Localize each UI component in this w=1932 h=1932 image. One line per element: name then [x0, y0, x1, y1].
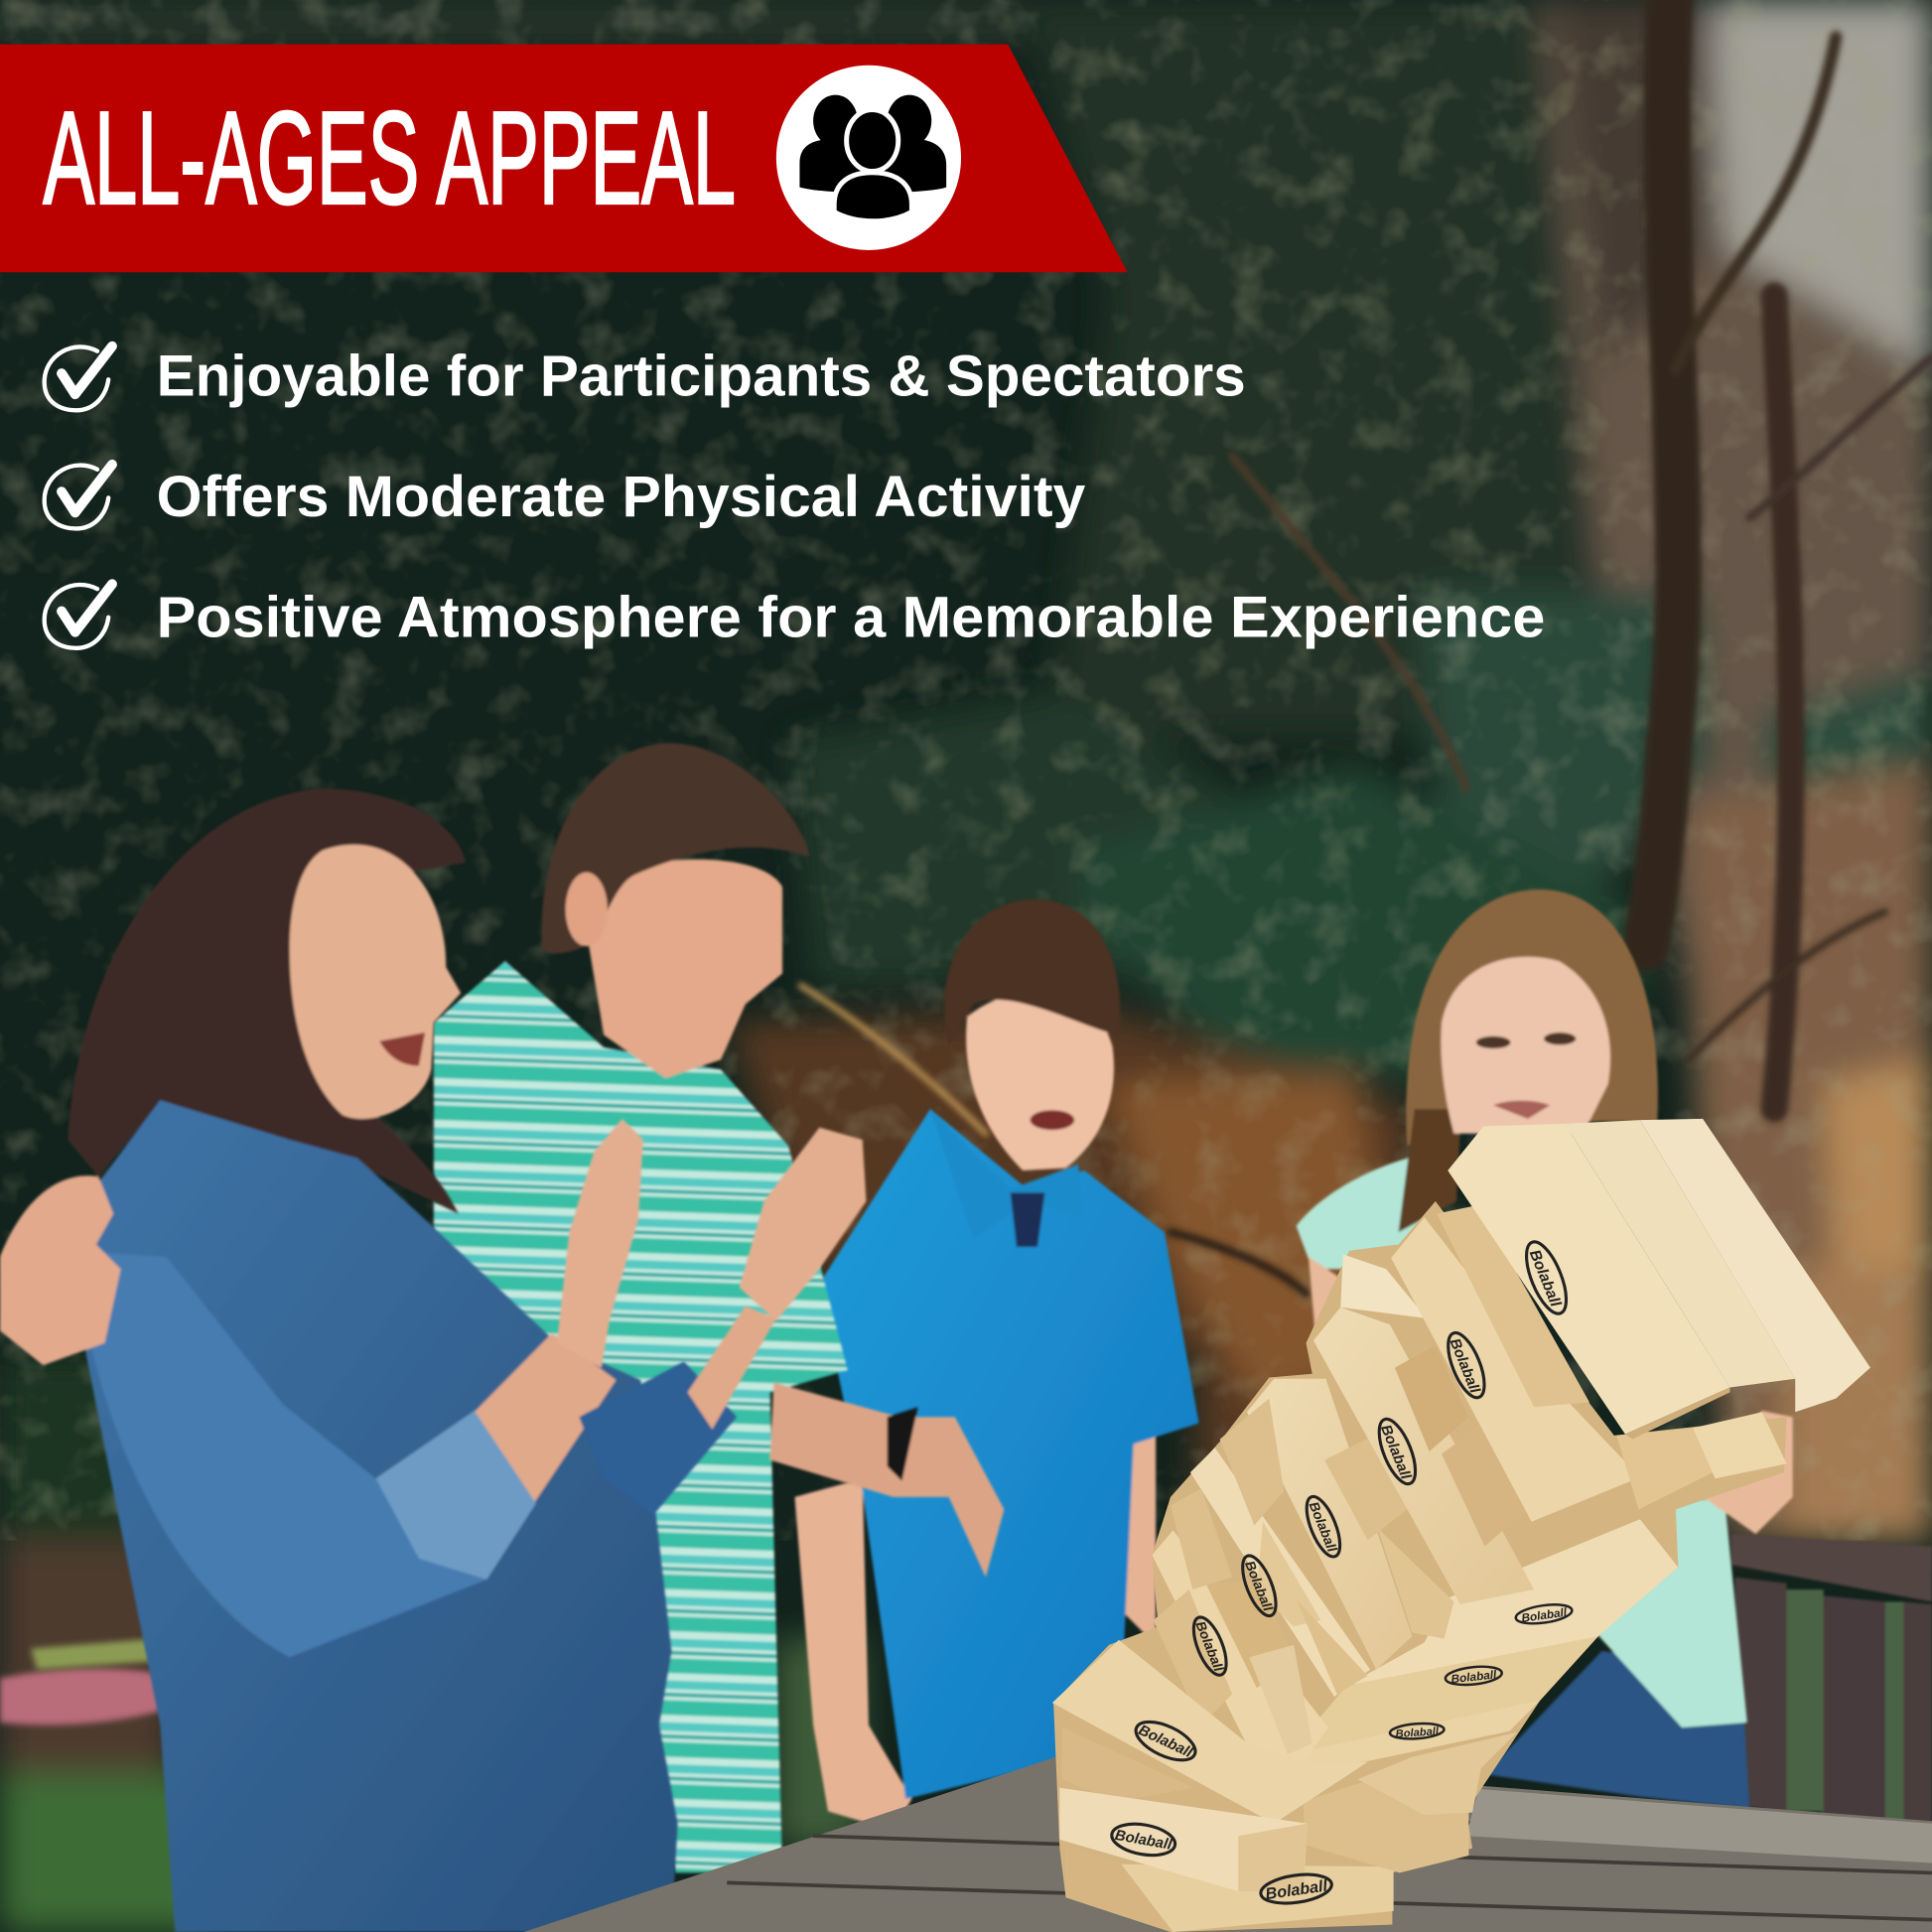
man shirt [434, 961, 848, 1872]
logo 6 [1187, 1613, 1233, 1679]
woman forearm right [688, 1307, 776, 1430]
logo 7: Bolaball [1136, 1723, 1195, 1761]
second layer [1391, 1217, 1640, 1522]
logo 11: Bolaball [1450, 1668, 1498, 1686]
girl face [1441, 957, 1610, 1134]
woman denim shirt [73, 1100, 678, 1932]
woman raised hand right [740, 1128, 866, 1320]
logo 9: Bolaball [1264, 1876, 1329, 1903]
base block [1067, 1849, 1394, 1932]
boy polo shirt [819, 1109, 1199, 1799]
icon: check mark 2 [45, 465, 112, 528]
woman raised hand left [557, 1119, 643, 1368]
woman sleeve cuff [376, 1411, 536, 1580]
pink flower bed [0, 1669, 170, 1725]
man ear [566, 873, 608, 946]
falling block tower [1052, 1119, 1870, 1932]
logo 2: Bolaball [1447, 1336, 1482, 1397]
checklist [45, 344, 1545, 650]
boy face [966, 991, 1114, 1171]
logo 4 [1300, 1492, 1347, 1561]
logo 8: Bolaball [1114, 1828, 1173, 1854]
top slab right [1640, 1119, 1870, 1412]
logo 9 [1259, 1870, 1333, 1907]
icon: check mark 3 [45, 584, 112, 648]
girl jeans [1484, 1651, 1749, 1809]
item 1 [45, 344, 1246, 410]
item 3 [45, 584, 1545, 650]
fifth layer [1190, 1448, 1370, 1697]
boy collar [930, 1109, 1084, 1238]
girl hair [1406, 890, 1658, 1146]
man neck and face [579, 860, 782, 1078]
item text 1: Enjoyable for Participants & Spectators [157, 344, 1246, 408]
girl arm [1309, 1257, 1793, 1534]
girl features [1476, 1033, 1576, 1119]
man forearm [770, 1382, 1004, 1578]
boy arms [794, 1436, 1156, 1831]
boy mouth [1031, 1110, 1074, 1130]
logo 10: Bolaball [1521, 1606, 1569, 1625]
slab B [1289, 1626, 1598, 1754]
logo 5 [1236, 1552, 1283, 1620]
woman hair [68, 788, 466, 1213]
logo 8 [1109, 1820, 1177, 1860]
logo 3: Bolaball [1377, 1423, 1414, 1482]
logo 5: Bolaball [1242, 1559, 1276, 1614]
logo 11 [1445, 1664, 1503, 1687]
fallen block [1052, 1640, 1368, 1824]
logo 10 [1515, 1601, 1574, 1626]
woman bare forearm left [472, 1333, 617, 1506]
logo 3 [1372, 1415, 1423, 1488]
person: boy [794, 899, 1199, 1831]
logo 2 [1441, 1328, 1492, 1402]
woman sleeve [76, 1251, 486, 1657]
small block [1062, 1727, 1194, 1801]
bottom block [1059, 1788, 1308, 1891]
sixth layer [1152, 1530, 1328, 1806]
wooden table [523, 1756, 1932, 1932]
banner shape [0, 45, 1128, 272]
right upper block [1358, 1732, 1517, 1815]
man watch [888, 1407, 918, 1481]
boy hair [944, 899, 1120, 1047]
top slab edge [1625, 1387, 1729, 1440]
woman face [290, 845, 461, 1119]
yellow flower bed [31, 1639, 160, 1670]
tower mass [1053, 1201, 1787, 1932]
item text 2: Offers Moderate Physical Activity [157, 465, 1086, 529]
logo 7 [1131, 1714, 1201, 1768]
logo 12 [1389, 1722, 1445, 1741]
end pieces [1616, 1428, 1713, 1509]
woman mouth [379, 1033, 425, 1066]
icon: check mark 1 [45, 346, 112, 410]
woman sleeve right [579, 1361, 737, 1516]
girl braid [1399, 1109, 1461, 1232]
logo 6: Bolaball [1192, 1619, 1227, 1675]
man hair [542, 743, 809, 953]
logo 1: Bolaball [1526, 1247, 1564, 1310]
third layer [1313, 1308, 1534, 1604]
banner heading: ALL-AGES APPEAL [43, 85, 736, 232]
logo 1 [1518, 1237, 1575, 1318]
slab A [1346, 1519, 1678, 1686]
item 2 [45, 465, 1086, 529]
person: man [434, 743, 1004, 1872]
right lower block [1304, 1782, 1468, 1872]
man hand on shoulder [0, 1175, 121, 1365]
person: girl [1297, 890, 1793, 1809]
title banner [0, 45, 1128, 272]
logo 12: Bolaball [1395, 1725, 1440, 1740]
top slab left [1448, 1124, 1729, 1435]
icon: group of people [776, 66, 961, 250]
fourth layer [1247, 1379, 1412, 1670]
item text 3: Positive Atmosphere for a Memorable Experience [157, 586, 1545, 650]
girl shirt [1297, 1156, 1747, 1727]
person: woman [0, 788, 866, 1932]
top slab middle [1565, 1120, 1795, 1387]
logo 4: Bolaball [1307, 1499, 1340, 1555]
slab C [1289, 1691, 1540, 1774]
wooden bench [1731, 1534, 1932, 1824]
